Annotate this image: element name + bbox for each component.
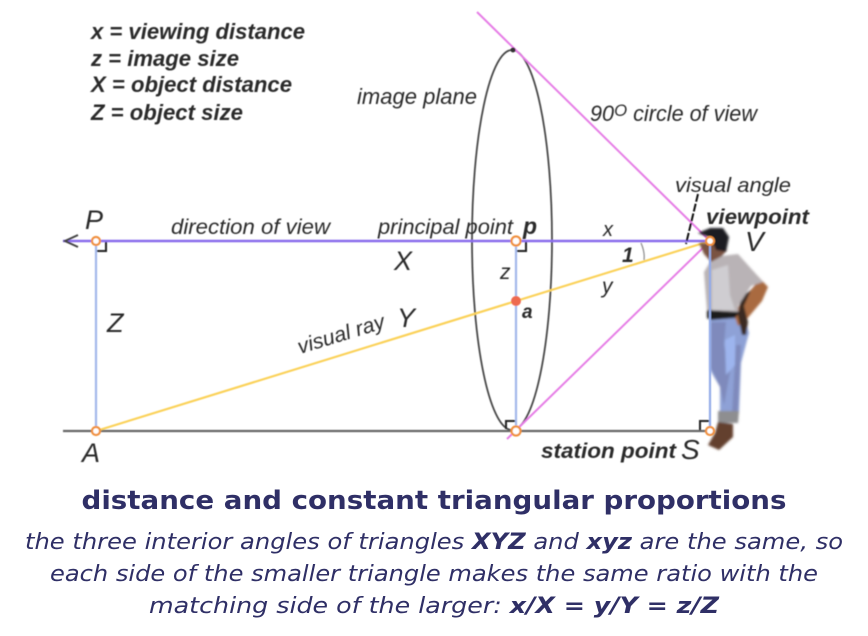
direction of view line [63,240,710,242]
plane top marker [510,48,516,52]
shirt highlight [712,265,735,310]
figure: man standing at viewpoint [698,228,768,450]
jeans shading [711,322,741,412]
direction arrow [65,235,78,247]
cap [698,228,729,252]
caption body: the three interior angles of triangles XYZ and xyz are the same, so [25,529,843,555]
caption title: distance and constant triangular proportions [82,486,786,516]
caption body: each side of the smaller triangle makes the same ratio with the [50,561,818,587]
legend text block [89,19,305,125]
ground line [63,430,710,432]
diagram labels: viewpoint [706,206,810,229]
legend text block: x = viewing distance [90,19,305,44]
forearm [734,270,768,326]
legend text block: X = object distance [89,72,292,97]
caption body [25,529,843,619]
diagram labels: visual ray [295,310,389,359]
diagram labels: V [745,226,766,257]
diagram labels: circle of view [627,101,759,126]
diagram labels: y [600,275,614,298]
shirt [704,254,763,312]
visual ray [96,241,710,431]
diagram labels: p [522,213,537,239]
legend text block: z = image size [90,46,239,71]
vertical object and image lines [96,241,516,431]
diagram labels: A [80,438,100,468]
diagram labels: principal point [377,215,514,239]
diagram labels: x [602,219,614,241]
diagram labels: station point [541,439,677,463]
belt [707,310,740,320]
boot [708,422,733,450]
caption body: matching side of the larger: x/X = y/Y = z/Z [149,593,720,619]
diagram labels: O [614,101,627,120]
diagram labels: X [393,246,413,276]
right angle markers [97,242,709,430]
magenta 90 degree circle of view lines [477,12,710,439]
visual angle pointer [686,194,698,244]
vertical viewpoint to station point line [709,241,711,431]
dark shadow at waist [738,290,751,335]
neck and face [699,243,727,262]
diagram labels: direction of view [171,215,332,239]
diagram labels: P [85,205,103,235]
diagram labels: z [499,261,511,284]
diagram labels: S [681,434,700,465]
jeans highlight [725,335,735,375]
diagram [63,12,810,468]
point a marker [511,296,521,306]
diagram labels: a [522,302,533,323]
diagram labels: visual angle [675,174,791,197]
diagram labels: image plane [357,84,477,109]
socks [718,411,739,423]
diagram labels: Y [397,303,417,333]
legend text block: Z = object size [90,100,243,125]
point markers [92,236,714,436]
diagram labels: 1 [622,244,634,267]
diagram labels: Z [106,308,125,338]
diagram labels: 90 [590,101,614,126]
diagram labels [80,84,810,468]
image plane ellipse [472,50,552,430]
jeans [710,318,749,413]
visual angle arc [641,243,644,260]
